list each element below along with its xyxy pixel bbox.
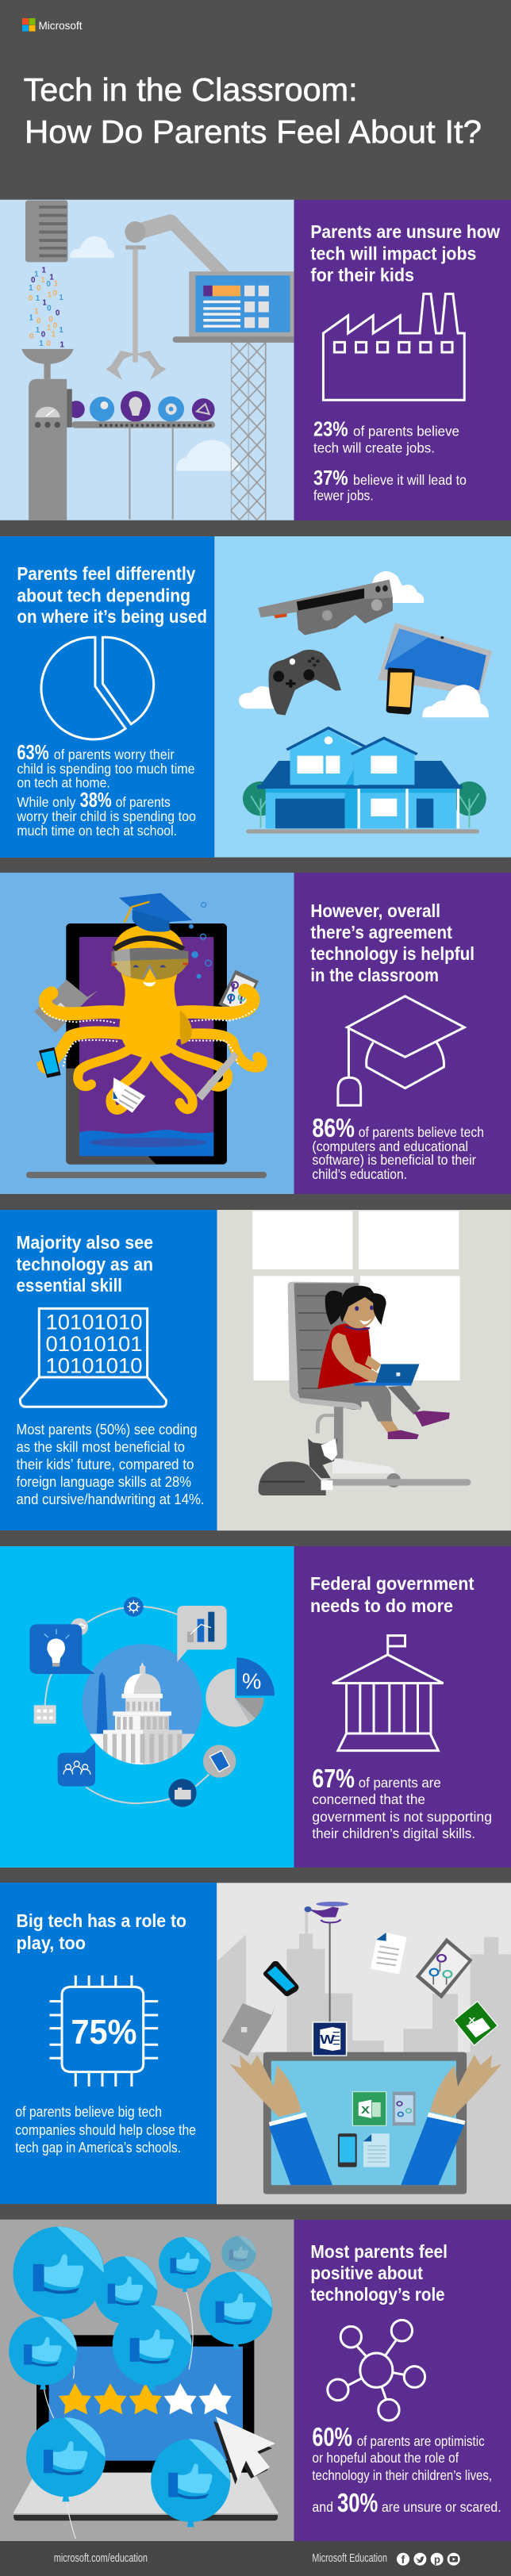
body text: and cursive/handwriting at 14%. xyxy=(16,1491,205,1507)
icons: social media: p xyxy=(434,2553,440,2566)
capitol scene xyxy=(29,1597,275,1807)
heading: on where it’s being used xyxy=(17,606,207,627)
illustration: capitol and data icons xyxy=(0,1546,294,1868)
illustration: factory machine: 1 xyxy=(29,314,33,323)
illustration: factory machine: 0 xyxy=(53,289,57,298)
panel: positive about technology xyxy=(0,2220,511,2541)
illustration: factory machine: 1 xyxy=(34,270,39,279)
heading xyxy=(310,221,500,285)
Microsoft logo: Microsoft xyxy=(38,19,83,32)
stat: 23% and 37%: believe it will lead to xyxy=(353,472,467,488)
illustration: factory machine: 1 xyxy=(42,266,46,274)
illustration: factory machine: 1 xyxy=(59,294,63,302)
background xyxy=(0,873,294,1194)
panel background xyxy=(294,200,511,520)
stat: 23% and 37%: fewer jobs. xyxy=(313,487,374,503)
illustration: factory machine: 1 xyxy=(36,326,40,335)
stat: 63% and 38%: 63% xyxy=(17,740,49,764)
capitol scene: % xyxy=(242,1668,261,1693)
body text xyxy=(16,1421,205,1507)
stat: 63% and 38%: worry their child is spending too xyxy=(16,808,196,824)
heading: technology as an xyxy=(16,1254,153,1275)
illustration: factory machine: 1 xyxy=(51,331,56,340)
body text: tech gap in America’s schools. xyxy=(15,2139,181,2156)
illustration: factory machine: 0 xyxy=(31,276,36,285)
heading: in the classroom xyxy=(310,965,439,985)
panel: federal government xyxy=(0,1546,511,1868)
stat: 86%: 86% xyxy=(312,1113,355,1142)
panel: helpful in the classroom xyxy=(0,873,511,1194)
illustration: factory machine: 0 xyxy=(29,332,34,341)
illustration: factory machine: 0 xyxy=(56,309,60,318)
stat: 60% and 30% xyxy=(312,2422,501,2517)
illustration: factory machine: 0 xyxy=(46,280,51,289)
stat: 23% and 37%: 23% xyxy=(313,417,348,441)
body text: their kids’ future, compared to xyxy=(16,1456,194,1472)
body text: as the skill most beneficial to xyxy=(16,1438,185,1455)
heading: positive about xyxy=(310,2263,423,2283)
illustration: octopus with tablet xyxy=(0,873,294,1194)
heading xyxy=(16,1910,186,1953)
icon: laptop with binary: 10101010 xyxy=(46,1311,143,1334)
stat: 86%: of parents believe tech xyxy=(359,1124,484,1140)
illustration: factory machine: 0 xyxy=(41,331,46,340)
panel background xyxy=(0,1883,217,2204)
icon: factory xyxy=(323,294,464,400)
stat: 23% and 37%: 37% xyxy=(313,466,348,489)
illustration: factory machine: 0 xyxy=(36,317,41,325)
illustration: hands and tablet with apps: W xyxy=(320,2033,335,2047)
stat: 67%: concerned that the xyxy=(312,1791,425,1807)
heading: there’s agreement xyxy=(310,922,452,942)
stat: 67%: of parents are xyxy=(359,1775,441,1791)
illustration: factory machine xyxy=(0,200,294,520)
octopus scene xyxy=(34,893,262,1165)
stat: 23% and 37%: tech will create jobs. xyxy=(313,440,435,456)
heading: Majority also see xyxy=(16,1232,153,1253)
background xyxy=(0,1546,294,1868)
illustration: factory machine: 1 xyxy=(59,326,63,335)
heading: Parents feel differently xyxy=(17,563,196,584)
icon: network xyxy=(328,2320,425,2421)
heading: Federal government xyxy=(310,1573,474,1594)
heading: needs to do more xyxy=(310,1595,453,1616)
illustration: hands and tablet with apps: X xyxy=(468,2015,476,2025)
icon: chip with 75%: 75% xyxy=(71,2013,136,2052)
illustration: factory machine: 0 xyxy=(48,315,53,324)
Microsoft logo xyxy=(22,18,83,32)
illustration: factory machine: 1 xyxy=(49,274,54,282)
stat: 23% and 37%: of parents believe xyxy=(353,424,459,440)
illustration: factory machine: 1 xyxy=(29,284,33,293)
illustration: girl with laptop and cat xyxy=(217,1210,511,1530)
stat: 86% xyxy=(312,1113,484,1182)
illustration: factory machine: 1 xyxy=(36,294,40,303)
stat: 63% and 38%: While only xyxy=(17,794,76,810)
title: Tech in the Classroom: xyxy=(24,71,358,108)
footer xyxy=(0,2541,511,2576)
stat: 63% and 38%: much time on tech at school. xyxy=(17,823,177,839)
icon: chip with 75% xyxy=(49,1975,158,2087)
shadow bar xyxy=(26,1172,267,1178)
body text: companies should help close the xyxy=(15,2121,196,2138)
stat: 67%: 67% xyxy=(312,1764,355,1793)
stat: 60% and 30%: are unsure or scared. xyxy=(382,2499,501,2515)
icon: laptop with binary: 10101010 xyxy=(46,1354,143,1378)
illustration: factory machine: 1 xyxy=(34,308,39,317)
panel: essential skill xyxy=(0,1210,511,1530)
panel: jobs xyxy=(0,200,511,520)
illustration: factory machine: 0 xyxy=(46,340,51,348)
icon: government building xyxy=(332,1636,444,1751)
illustration: factory machine: 1 xyxy=(60,341,64,350)
illustration: factory machine: 1 xyxy=(39,340,44,348)
body text xyxy=(15,2103,196,2156)
stat: 86%: software) is beneficial to their xyxy=(312,1152,476,1168)
body text: Most parents (50%) see coding xyxy=(16,1421,197,1438)
stat: 60% and 30%: and xyxy=(312,2499,333,2515)
stat: 63% and 38% xyxy=(16,740,196,839)
body text: of parents believe big tech xyxy=(15,2103,162,2120)
header xyxy=(22,18,482,150)
stat: 63% and 38%: of parents worry their xyxy=(54,747,175,762)
stat: 60% and 30%: 30% xyxy=(337,2488,378,2517)
illustration: hands and tablet with apps xyxy=(217,1883,511,2204)
stat: 67%: government is not supporting xyxy=(312,1809,492,1825)
illustration: factory machine: 1 xyxy=(54,279,59,288)
stat: 86%: child’s education. xyxy=(312,1166,407,1182)
title xyxy=(24,71,482,150)
icon: graduation cap xyxy=(338,996,464,1105)
heading xyxy=(17,563,207,627)
stat: 63% and 38%: of parents xyxy=(116,794,171,810)
stat: 63% and 38%: 38% xyxy=(80,788,112,812)
illustration: factory machine: 0 xyxy=(47,304,52,313)
heading: technology is helpful xyxy=(310,943,474,964)
stat: 63% and 38%: child is spending too much time xyxy=(17,761,195,777)
illustration: factory machine: 1 xyxy=(48,291,52,300)
panel background xyxy=(0,536,214,858)
stat: 63% and 38%: on tech at home. xyxy=(17,775,110,791)
illustration: factory machine: 0 xyxy=(53,321,57,330)
panel: big tech xyxy=(0,1883,511,2204)
heading: essential skill xyxy=(16,1275,122,1296)
panel background xyxy=(294,2220,511,2541)
illustration: thumbs-up balloons and laptop xyxy=(0,2220,294,2541)
heading xyxy=(16,1232,153,1296)
heading: However, overall xyxy=(310,900,440,921)
stat: 60% and 30%: or hopeful about the role of xyxy=(312,2450,459,2466)
heading: play, too xyxy=(16,1933,86,1953)
illustration: factory machine: 1 xyxy=(47,324,52,333)
icons: social media xyxy=(397,2553,460,2566)
heading: technology’s role xyxy=(310,2284,445,2305)
icon: laptop with binary: 01010101 xyxy=(46,1332,143,1356)
stat: 23% and 37% xyxy=(313,417,467,503)
panel: where tech is used xyxy=(0,536,511,858)
illustration: factory machine: 1 xyxy=(40,276,45,285)
heading xyxy=(310,1573,474,1616)
heading xyxy=(310,2241,448,2305)
panel background xyxy=(0,1210,217,1530)
illustration: factory machine: 0 xyxy=(29,294,33,303)
heading xyxy=(310,900,474,985)
body text: foreign language skills at 28% xyxy=(16,1473,191,1490)
heading: Big tech has a role to xyxy=(16,1910,186,1931)
heading: Most parents feel xyxy=(310,2241,448,2262)
stat: 60% and 30%: of parents are optimistic xyxy=(357,2433,485,2449)
heading: for their kids xyxy=(310,264,414,285)
icon: pie chart xyxy=(41,637,154,739)
illustration: hands and tablet with apps: X xyxy=(361,2104,370,2117)
illustration: devices and house xyxy=(214,536,511,858)
stat: 67% xyxy=(312,1764,492,1841)
stat: 86%: (computers and educational xyxy=(312,1138,468,1154)
illustration: factory machine: 0 xyxy=(36,284,41,293)
illustration: factory machine: 1 xyxy=(42,298,47,307)
footer background xyxy=(0,2541,511,2576)
panel background xyxy=(294,873,511,1194)
footer link: microsoft.com/education xyxy=(54,2552,148,2565)
panel background xyxy=(294,1546,511,1868)
stat: 67%: their children’s digital skills. xyxy=(312,1825,475,1841)
icons: social media: f xyxy=(402,2553,405,2566)
title: How Do Parents Feel About It? xyxy=(25,113,482,150)
stat: 60% and 30%: 60% xyxy=(312,2422,352,2451)
footer brand: Microsoft Education xyxy=(312,2552,387,2565)
icon: laptop with binary xyxy=(20,1308,167,1407)
heading: tech will impact jobs xyxy=(310,243,476,263)
heading: about tech depending xyxy=(17,585,190,605)
